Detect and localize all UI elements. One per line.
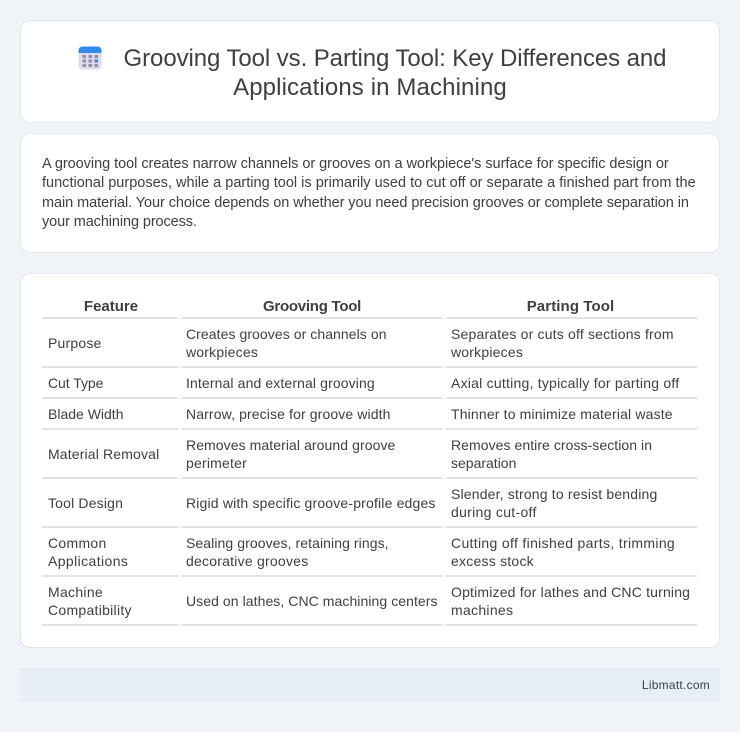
row: purpose: Purpose [48,335,102,351]
panel: comparison table [20,273,720,648]
row: material removal: perimeter [186,455,247,471]
footer source text: Libmatt.com [642,678,710,692]
row: machine compatibility [48,584,690,618]
row: tool design: during cut-off [451,504,537,520]
icon: calendar [78,46,102,70]
table header: Grooving Tool [263,298,361,315]
intro paragraph: functional purposes, while a parting tool is primarily used to cut off or separate a finished part from the [42,175,696,191]
row: blade width: Thinner to minimize material waste [451,406,673,422]
title: Applications in Machining [233,74,507,101]
table header: Parting Tool [527,298,614,315]
row: machine compatibility: Used on lathes, CNC machining centers [186,593,438,609]
row: material removal: Removes entire cross-section in [451,437,652,453]
row: purpose [48,326,674,360]
row: purpose: workpieces [451,344,523,360]
row: material removal: separation [451,455,516,471]
panel: intro text card [20,133,720,253]
row: material removal [48,437,652,471]
row: machine compatibility: Machine [48,584,103,600]
row: common applications: excess stock [451,553,534,569]
row: material removal: Material Removal [48,446,159,462]
row: tool design: Rigid with specific groove-profile edges [186,495,436,511]
title [124,45,666,101]
row: common applications: Applications [48,553,128,569]
intro paragraph [42,156,696,230]
title: Grooving Tool vs. Parting Tool: Key Differences and [124,45,666,72]
row: purpose: workpieces [186,344,258,360]
row: common applications: Common [48,535,107,551]
row: cut type: Internal and external grooving [186,375,375,391]
row: tool design [48,486,657,520]
row: material removal: Removes material around groove [186,437,395,453]
row: common applications: Sealing grooves, retaining rings, [186,535,389,551]
row: machine compatibility: machines [451,602,513,618]
row: blade width: Narrow, precise for groove width [186,406,391,422]
row: cut type: Axial cutting, typically for parting off [451,375,679,391]
intro paragraph: main material. Your choice depends on whether you need precision grooves or complete separation in [42,195,689,211]
row: tool design: Tool Design [48,495,123,511]
row: common applications [48,535,675,569]
row: purpose: Creates grooves or channels on [186,326,387,342]
row: tool design: Slender, strong to resist bending [451,486,657,502]
table header [84,298,614,315]
row: common applications: decorative grooves [186,553,308,569]
row: common applications: Cutting off finished parts, trimming [451,535,675,551]
row: blade width: Blade Width [48,406,123,422]
row: cut type [48,375,680,391]
intro paragraph: A grooving tool creates narrow channels or grooves on a workpiece's surface for specific design or [42,156,669,172]
table header: Feature [84,298,138,315]
row: blade width [48,406,673,422]
row: machine compatibility: Compatibility [48,602,132,618]
row: machine compatibility: Optimized for lathes and CNC turning [451,584,690,600]
footer bar [20,668,720,702]
row: cut type: Cut Type [48,375,103,391]
panel: title card [20,20,720,123]
intro paragraph: your machining process. [42,214,197,230]
row: purpose: Separates or cuts off sections from [451,326,674,342]
